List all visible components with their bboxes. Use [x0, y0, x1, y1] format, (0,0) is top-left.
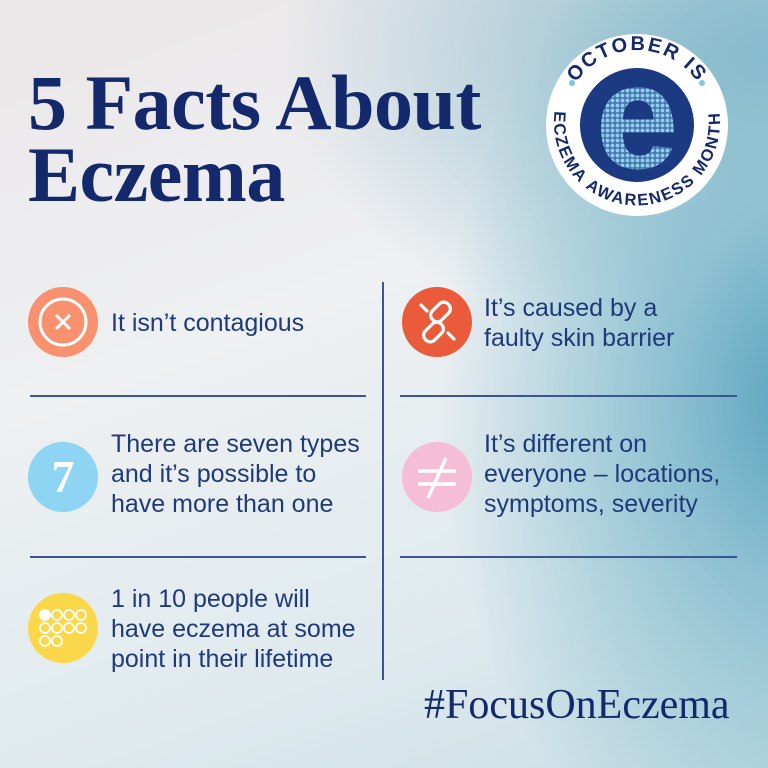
text: It’s different on: [484, 430, 647, 458]
icon: 7: 7: [52, 451, 74, 502]
text: It isn’t contagious: [111, 309, 304, 337]
title: Eczema: [28, 131, 285, 218]
title: [28, 59, 481, 218]
text: [111, 585, 356, 673]
text: symptoms, severity: [484, 490, 698, 518]
fact 5: [402, 430, 720, 518]
icon: not equal: [402, 442, 472, 512]
icon: broken link: [402, 287, 472, 357]
title: 5 Facts About: [28, 59, 481, 146]
text: have more than one: [111, 490, 333, 518]
badge: October is Eczema Awareness Month: e: [595, 32, 679, 200]
text: point in their lifetime: [111, 645, 333, 673]
badge: October is Eczema Awareness Month: OCTOBER IS: [568, 36, 706, 80]
text: everyone – locations,: [484, 460, 720, 488]
text: and it’s possible to: [111, 460, 316, 488]
text: [484, 430, 720, 518]
fact 1: [28, 287, 304, 357]
text: faulty skin barrier: [484, 324, 674, 352]
fact 3: [28, 585, 356, 673]
text: There are seven types: [111, 430, 360, 458]
fact 4: [402, 287, 674, 357]
fact 2: [28, 430, 360, 518]
text: [484, 294, 674, 352]
icon: x circle: [28, 287, 98, 357]
text: have eczema at some: [111, 615, 356, 643]
text: [111, 430, 360, 518]
divider vertical: [382, 282, 384, 680]
text: 1 in 10 people will: [111, 585, 310, 613]
hashtag: #FocusOnEczema: [424, 682, 730, 728]
badge: October is Eczema Awareness Month: [546, 32, 728, 216]
icon: 7: [28, 442, 98, 512]
badge: October is Eczema Awareness Month: e: [595, 32, 679, 200]
badge: October is Eczema Awareness Month: ECZEMA AWARENESS MONTH: [554, 112, 720, 206]
text: It’s caused by a: [484, 294, 657, 322]
icon: 1 in 10 dots: [28, 593, 98, 663]
